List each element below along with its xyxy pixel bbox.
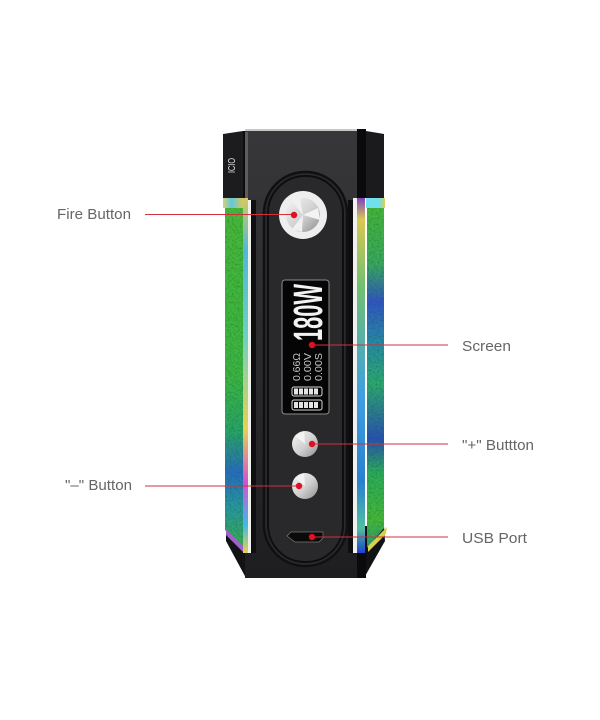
callout: Screen xyxy=(309,339,511,355)
top left shoulder xyxy=(223,131,243,198)
black pillar right xyxy=(357,129,366,198)
central faceplate xyxy=(245,130,357,578)
black pillar lower right xyxy=(357,553,366,578)
black pillar left xyxy=(243,131,245,198)
left white strip xyxy=(248,200,251,553)
left gray edge xyxy=(245,132,248,198)
top highlight xyxy=(245,129,357,131)
callout: Fire Button: Fire Button xyxy=(57,207,131,223)
time: 0.00S xyxy=(314,353,325,381)
screen readings xyxy=(292,352,325,381)
battery icons xyxy=(292,387,322,410)
USB port xyxy=(287,532,323,542)
racetrack inset inner xyxy=(268,176,343,562)
callout: USB Port: USB Port xyxy=(462,531,527,547)
left bottom trim xyxy=(226,529,243,552)
left top trim xyxy=(223,198,244,208)
screen xyxy=(282,280,331,414)
callout: USB Port xyxy=(309,531,527,547)
right white strip xyxy=(353,198,357,553)
racetrack inset outer xyxy=(264,172,347,566)
resistance: 0.66Ω xyxy=(292,352,303,381)
device: vape mod xyxy=(223,129,387,578)
brand logo: ICIO xyxy=(227,158,238,173)
right bottom trim xyxy=(368,527,387,552)
callout: minus button: "–" Button xyxy=(65,478,132,494)
minus button xyxy=(292,473,318,499)
black side rail right xyxy=(348,200,353,553)
voltage: 0.00V xyxy=(303,353,314,381)
left rainbow strip xyxy=(243,198,248,553)
bottom black base xyxy=(226,526,385,578)
black side rail left xyxy=(251,200,256,553)
callout: Screen: Screen xyxy=(462,339,511,355)
right side skin panel xyxy=(367,206,384,548)
callout: plus button xyxy=(309,438,534,454)
plus button xyxy=(292,431,318,457)
screen wattage reading: 180W xyxy=(285,284,331,341)
callout: Fire Button xyxy=(57,207,297,223)
fire button xyxy=(279,191,327,239)
callout: plus button: "+" Buttton xyxy=(462,438,534,454)
top right shoulder xyxy=(366,131,384,198)
callout: minus button xyxy=(65,478,302,494)
left side skin panel xyxy=(225,206,243,548)
right rainbow strip xyxy=(357,198,365,553)
right top trim xyxy=(366,198,385,208)
